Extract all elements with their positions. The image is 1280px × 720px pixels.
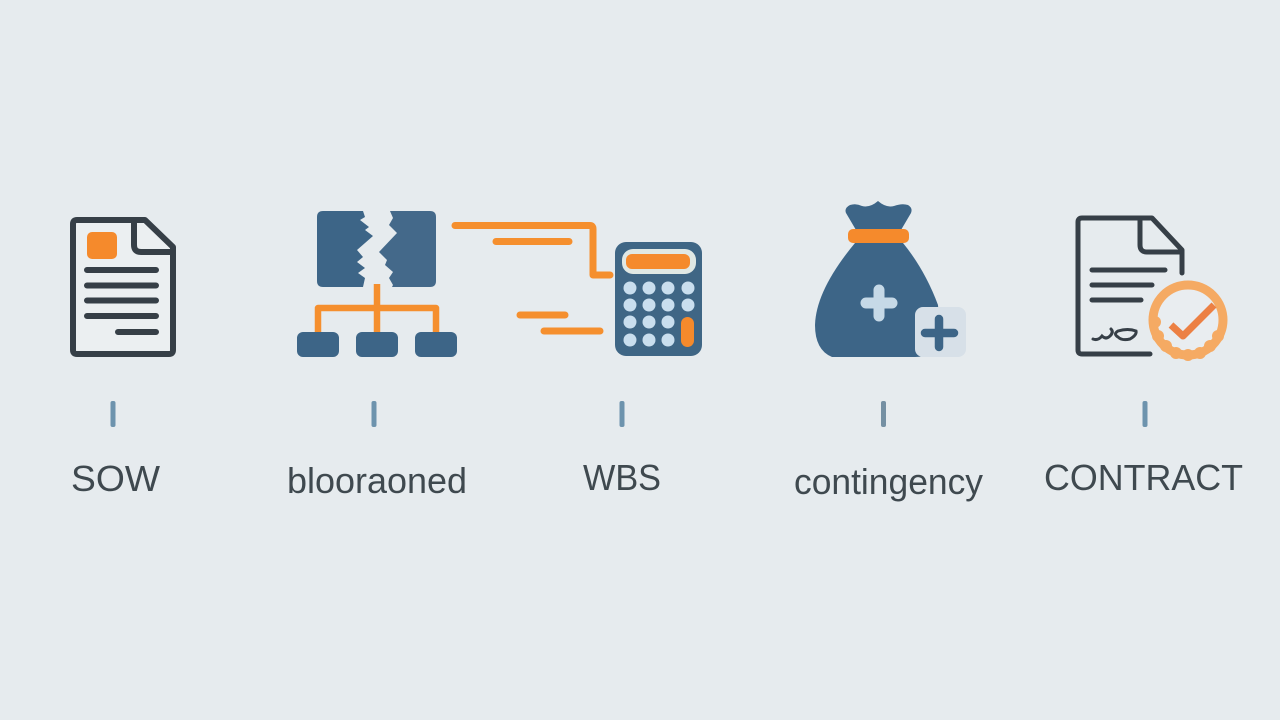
icon: contingency money bag (815, 201, 966, 357)
label: CONTRACT: CONTRACT (1044, 457, 1243, 498)
label: SOW: SOW (71, 458, 160, 499)
arrow: orange connector lines to calculator (455, 226, 610, 331)
icon: calculator (615, 242, 702, 356)
label: contingency: contingency (794, 461, 983, 502)
label: WBS: WBS (583, 457, 661, 498)
tick marks (110, 401, 1148, 427)
icon: signed contract with seal (1078, 218, 1224, 361)
label: blooraoned: blooraoned (287, 460, 467, 501)
icon: broken block and hierarchy (297, 211, 457, 357)
icon: SOW document (73, 220, 173, 354)
